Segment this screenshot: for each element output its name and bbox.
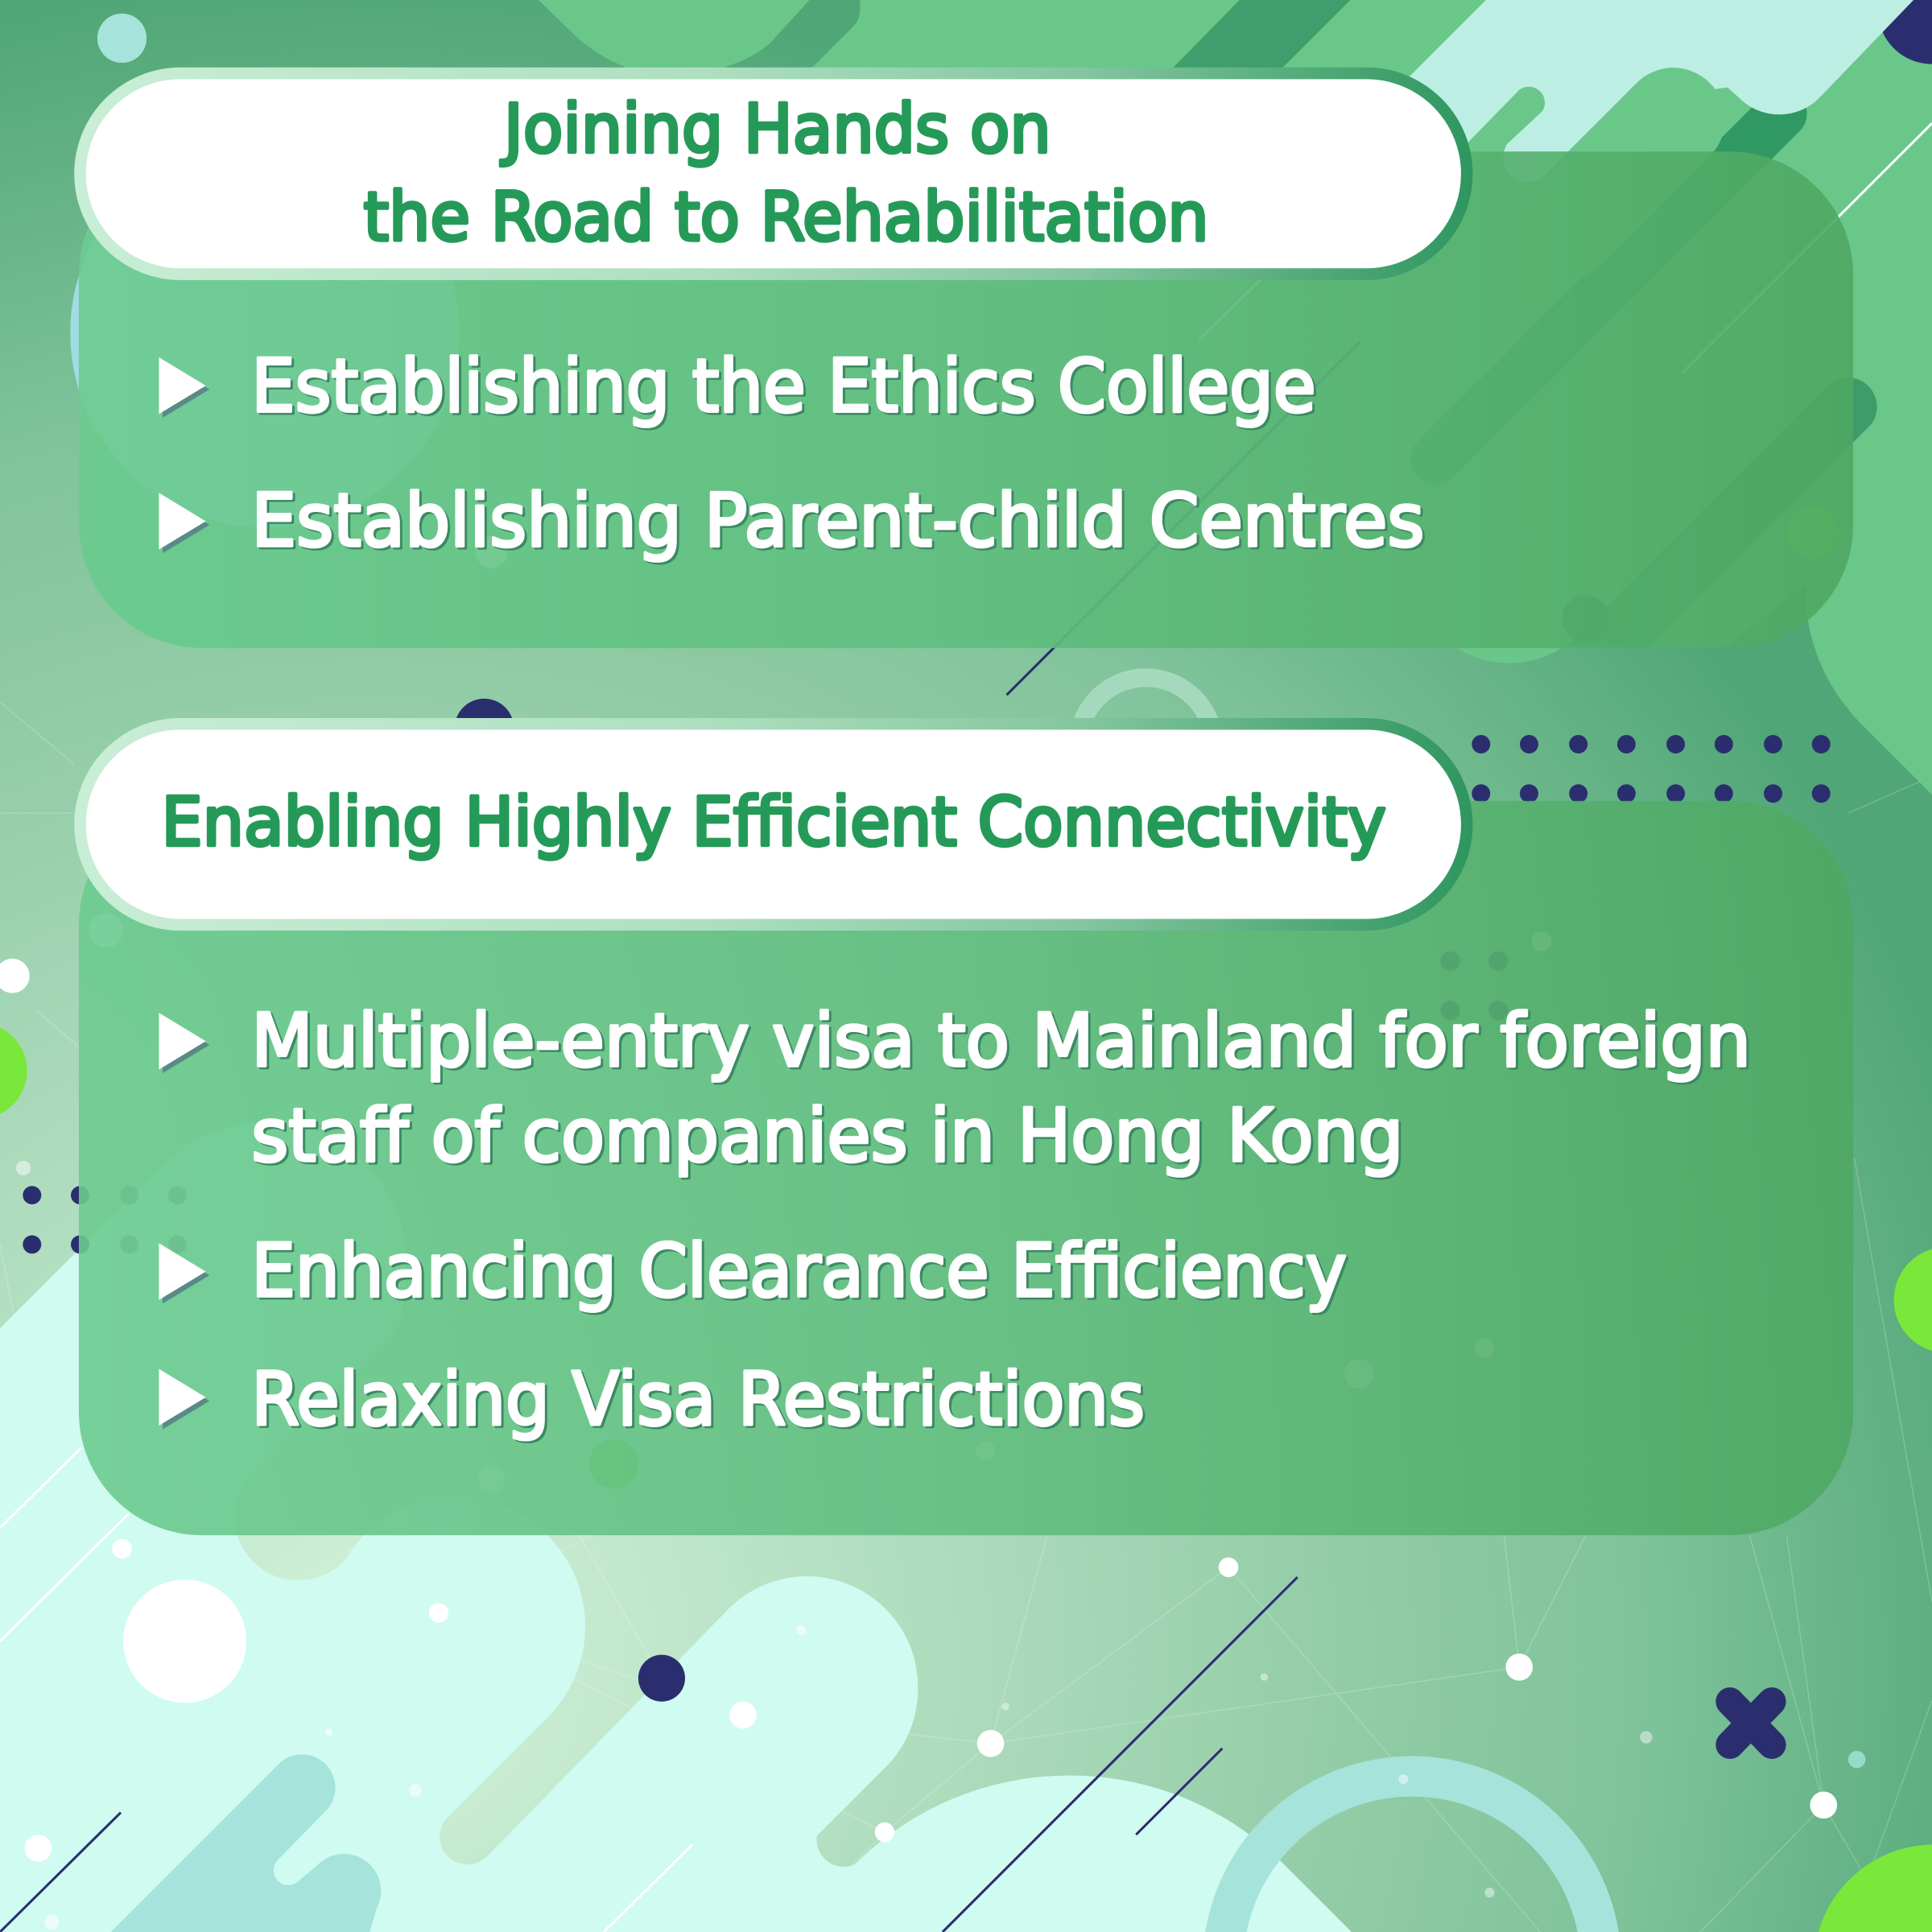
panel 2 bullet list: [159, 998, 1751, 1442]
background: ring arc: [1078, 678, 1214, 813]
panel: connectivity: [79, 724, 1853, 1535]
bullet icon: [159, 1243, 209, 1303]
background: faint network lines: [0, 702, 1932, 1932]
bullet icon: [159, 1013, 209, 1073]
bullet text: multiple-entry visa: Multiple-entry visa to Mainland for foreign: [251, 998, 1751, 1084]
bullet text: parent-child centres: Establishing Parent-child Centres: [251, 478, 1424, 564]
background: green capsule: [1565, 119, 1674, 228]
bullet text: ethics college: Establishing the Ethics College: [251, 344, 1316, 429]
bullet icon: [159, 493, 209, 553]
panel: rehabilitation: [79, 73, 1853, 648]
bullet text: visa restrictions: Relaxing Visa Restrictions: [251, 1356, 1145, 1442]
icon: navy cross: [1730, 1702, 1772, 1744]
panel 1 heading banner: [80, 73, 1467, 275]
background: lime circles: [0, 1022, 1932, 1932]
background: bottom-left teal capsule: [111, 1754, 381, 1932]
panel 1 heading: Joining Hands on: [500, 90, 1051, 168]
background: white and navy dots: [0, 536, 1837, 1930]
panel 1 heading: the Road to Rehabilitation: [364, 178, 1209, 256]
dot grid right: [1440, 735, 1831, 1020]
background: darker capsule on right edge: [1566, 378, 1877, 647]
background: teal ring: [1205, 1757, 1619, 1932]
background: upper-left teal circle: [70, 138, 460, 527]
background: mint band: [1410, 0, 1913, 182]
panel 2 heading banner: [80, 724, 1467, 925]
panel 2 heading: Enabling Highly Efficient Connectivity: [162, 783, 1386, 861]
bullet icon: [159, 357, 209, 418]
background: dark capsule behind mint band: [1435, 114, 1781, 460]
bullet icon: [159, 1369, 209, 1430]
background: navy corner circle: [1878, 0, 1932, 64]
background: darker diagonal band: [1084, 0, 1351, 190]
bullet text: multiple-entry visa: staff of companies in Hong Kong: [251, 1093, 1403, 1179]
bullet text: multiple-entry visa: [251, 998, 1751, 1179]
panel 1 bullet list: [159, 344, 1424, 564]
panel 1 heading: [364, 90, 1209, 256]
background: bottom-left mint shape: [0, 1122, 1352, 1932]
dot grid left: [23, 1186, 187, 1253]
background: green top and right shape: [81, 0, 1932, 795]
background: top blob: [539, 0, 810, 86]
bullet text: clearance efficiency: Enhancing Clearance Efficiency: [251, 1228, 1347, 1314]
